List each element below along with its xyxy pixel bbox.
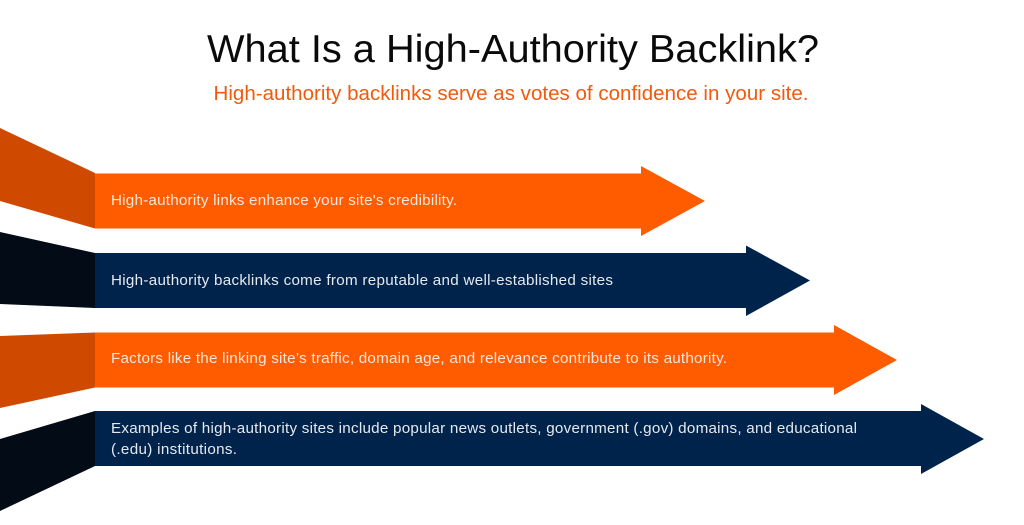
arrow body 2: [95, 246, 810, 316]
arrow body 1: [95, 166, 705, 236]
arrow text 1: High-authority links enhance your site's credibility.: [111, 192, 457, 209]
arrow body 4: [95, 404, 984, 474]
subtitle: High-authority backlinks serve as votes of confidence in your site.: [214, 82, 808, 105]
arrow text 2: High-authority backlinks come from reputable and well-established sites: [111, 272, 613, 289]
fold 1: [0, 128, 95, 228]
arrow text 4: Examples of high-authority sites include popular news outlets, government (.gov) domains, and educational: [111, 420, 857, 437]
title: What Is a High-Authority Backlink?: [207, 28, 819, 71]
arrow 1: credibility: [0, 128, 705, 236]
arrow 4: examples: [0, 404, 984, 511]
fold 3: [0, 332, 95, 408]
fold 4: [0, 411, 95, 511]
arrow text 4: (.edu) institutions.: [111, 441, 237, 458]
arrow 3: factors: [0, 325, 897, 408]
arrow text 3: Factors like the linking site’s traffic, domain age, and relevance contribute to its authority.: [111, 350, 727, 367]
arrow body 3: [95, 325, 897, 395]
fold 2: [0, 232, 95, 308]
arrow text 4: [111, 420, 857, 458]
arrow 2: reputable sites: [0, 232, 810, 316]
